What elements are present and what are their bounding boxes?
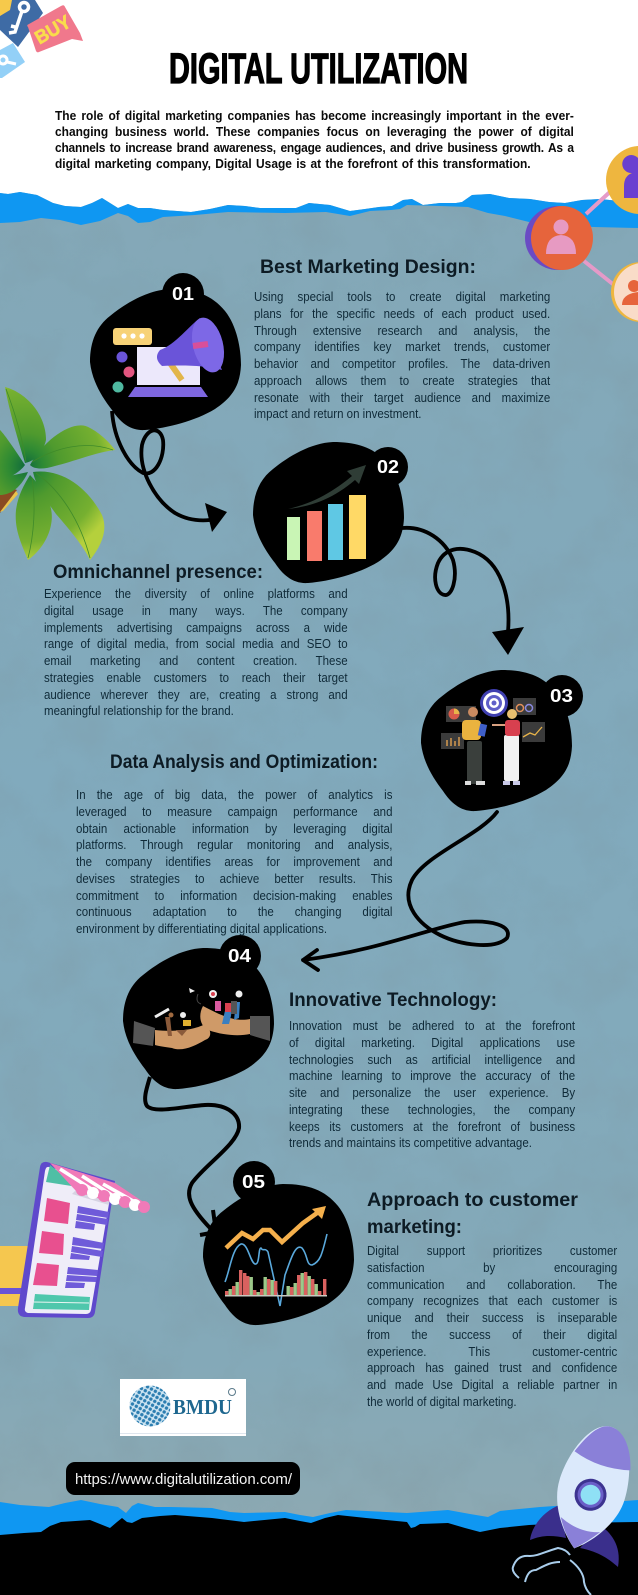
heading: [367, 1189, 578, 1238]
body text: technologies such as artificial intelligence and: [289, 1052, 575, 1066]
body text: approach has gained trust and confidence: [367, 1361, 617, 1375]
body text: impact and return on investment.: [254, 407, 421, 421]
body text: Innovation must be adhered to at the forefront: [289, 1019, 575, 1033]
body text: from the success of their digital: [367, 1328, 617, 1342]
body text: behavior and competitor profiles. The data-driven: [254, 357, 550, 371]
panel: step 4 illustration: [123, 935, 274, 1089]
body text: environment by differentiating digital applications.: [76, 922, 327, 936]
body text: company recognizes that each customer is: [367, 1294, 617, 1308]
panel: step 2 illustration: 02: [377, 457, 399, 477]
intro paragraph: channels to increase brand awareness, engage audiences, and drive business growth. As a: [55, 140, 574, 155]
logo: BMDU: [120, 1379, 246, 1436]
body text: [254, 290, 550, 421]
intro paragraph: digital marketing company, Digital Usage is at the forefront of this transformation.: [55, 156, 531, 171]
heading: Data Analysis and Optimization:: [110, 751, 378, 773]
body text: Experience the diversity of online platforms and: [44, 587, 348, 601]
body text: satisfaction by encouraging: [367, 1261, 617, 1275]
body text: meaningful relationship for the brand.: [44, 704, 234, 718]
body text: obtain actionable information by leveraging digital: [76, 822, 392, 836]
body text: digital usage in many ways. The company: [44, 604, 348, 618]
body text: devises strategies to achieve better results. This: [76, 872, 392, 886]
body text: keeps its customers at the forefront of business: [289, 1120, 575, 1134]
heading: Omnichannel presence:: [53, 561, 263, 583]
body text: Using special tools to create digital marketing: [254, 290, 550, 304]
body text: and made Use Digital a reliable partner in: [367, 1378, 617, 1392]
panel: step 5 illustration: 05: [242, 1172, 265, 1192]
body text: Digital support prioritizes customer: [367, 1244, 617, 1258]
panel: approach to customer marketing: [367, 1189, 617, 1409]
body text: approach allows them to create strategies that: [254, 374, 550, 388]
body text: [289, 1019, 575, 1150]
body text: platforms. Through regular monitoring and analysis,: [76, 838, 392, 852]
panel: step 5 illustration: [203, 1161, 354, 1325]
body text: email marketing and content creation. These: [44, 654, 348, 668]
body text: [367, 1244, 617, 1409]
connector: 01 to 02: [112, 411, 227, 532]
connector: 03 to 04: [303, 812, 508, 970]
body text: trends and maintains its competitive advantage.: [289, 1136, 532, 1150]
panel: step 1 illustration: 01: [172, 284, 194, 304]
panel: best marketing design: [254, 256, 550, 421]
panel: step 1 illustration: [90, 273, 241, 430]
body text: the company identifies areas for improvement and: [76, 855, 392, 869]
panel: omnichannel presence: [44, 561, 348, 718]
body text: range of digital media, from social media and SEO to: [44, 637, 348, 651]
heading: Best Marketing Design:: [260, 256, 476, 278]
icon: top-left tags: BUY: [32, 12, 75, 49]
body text: plans for the specific needs of each product used.: [254, 307, 550, 321]
body text: continuous adaptation to the changing digital: [76, 905, 392, 919]
body text: strategies enable customers to reach their target: [44, 671, 348, 685]
icon: top-left tags: [0, 0, 83, 78]
heading: Approach to customer: [367, 1189, 578, 1211]
body text: experience. This customer-centric: [367, 1344, 617, 1358]
icon: yellow card behind phone: [0, 1246, 28, 1306]
intro paragraph: The role of digital marketing companies has become increasingly important in the ever-: [55, 108, 574, 123]
icon: palm leaves: [0, 387, 115, 560]
body text: machine learning to improve the accuracy of the: [289, 1069, 575, 1083]
panel: step 2 illustration: [253, 442, 408, 583]
intro paragraph: changing business world. These companies focus on leveraging the power of digital: [55, 124, 574, 139]
panel: data analysis and optimization: [76, 751, 392, 936]
title: DIGITAL UTILIZATION: [169, 45, 468, 93]
body text: leveraged to measure campaign performance and: [76, 805, 392, 819]
url button: https://www.digitalutilization.com/: [75, 1471, 293, 1488]
icon: rocket: [513, 1417, 638, 1595]
body text: resonate with their target audience and maximize: [254, 390, 550, 404]
body text: communication and collaboration. The: [367, 1278, 617, 1292]
body text: company identifies key market trends, customer: [254, 340, 550, 354]
icon: phone shop: [18, 1162, 150, 1318]
body text: implements advertising campaigns across a wide: [44, 620, 348, 634]
heading: Innovative Technology:: [289, 989, 497, 1011]
body text: the world of digital marketing.: [367, 1395, 517, 1409]
body text: commitment to information decision-making enables: [76, 888, 392, 902]
body text: unique and their success is inseparable: [367, 1311, 617, 1325]
body text: audience wherever they are, creating a strong and: [44, 688, 348, 702]
body text: Through extensive research and analysis, the: [254, 324, 550, 338]
intro paragraph: [55, 108, 574, 171]
body text: [76, 788, 392, 936]
heading: marketing:: [367, 1216, 462, 1238]
body text: integrating these technologies, the company: [289, 1103, 575, 1117]
body text: In the age of big data, the power of analytics is: [76, 788, 392, 802]
icon: network of people: [525, 146, 638, 322]
panel: step 3 illustration: 03: [550, 686, 573, 706]
panel: innovative technology: [289, 989, 575, 1150]
logo: BMDU: BMDU: [173, 1395, 232, 1419]
panel: step 3 illustration: [421, 670, 583, 811]
panel: step 4 illustration: 04: [228, 946, 251, 966]
connector: 04 to 05: [145, 1077, 239, 1235]
body text: [44, 587, 348, 718]
connector: 02 to 03: [402, 528, 524, 655]
url button: [66, 1462, 300, 1495]
body text: of digital marketing. Digital applications use: [289, 1036, 575, 1050]
body text: site and personalize the user experience. By: [289, 1086, 575, 1100]
